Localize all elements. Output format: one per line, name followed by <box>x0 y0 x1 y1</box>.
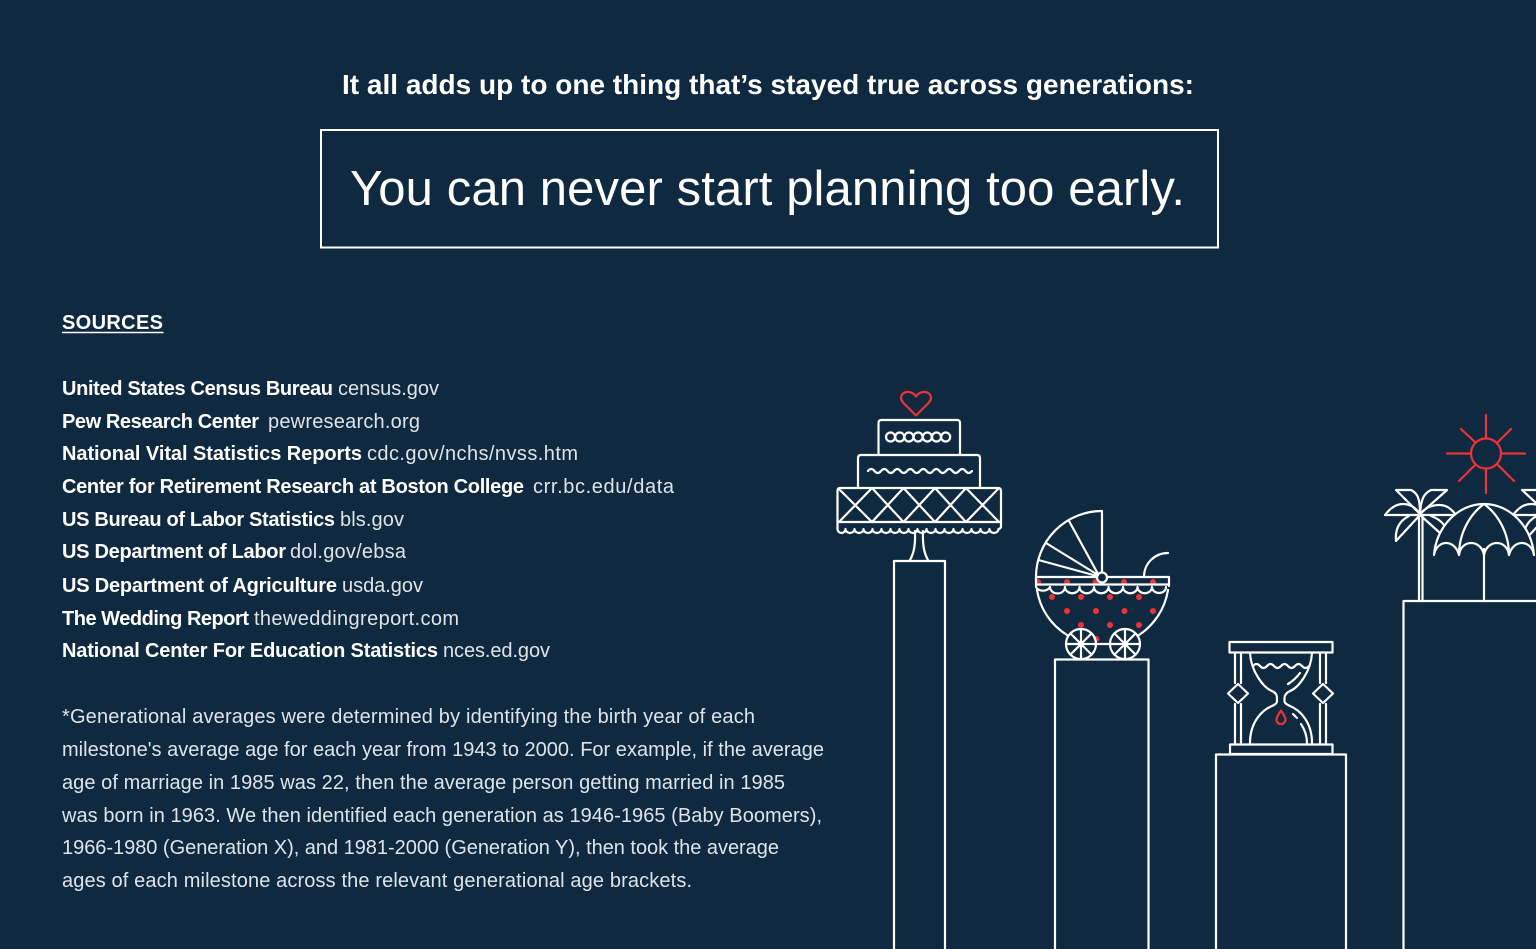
hourglass frame <box>1230 642 1332 754</box>
icon: wedding cake on column <box>838 392 1001 949</box>
sources list: US Department of Agriculture <box>62 575 337 597</box>
footnote text: ages of each milestone across the relevant generational age brackets. <box>62 870 692 892</box>
sources list: crr.bc.edu/data <box>533 476 675 498</box>
column <box>1055 660 1148 949</box>
cake plate scallops <box>838 522 1001 533</box>
stroller wheels <box>1066 629 1140 659</box>
column <box>1404 601 1536 949</box>
cake base lattice <box>838 488 1001 522</box>
column <box>1216 754 1346 949</box>
sources list: US Bureau of Labor Statistics <box>62 509 335 531</box>
cake icing wave <box>868 469 972 473</box>
sources list: US Department of Labor <box>62 541 286 563</box>
sources list: census.gov <box>338 378 439 400</box>
heading: It all adds up to one thing that’s stayed true across generations: <box>342 69 1194 100</box>
callout box: You can never start planning too early. <box>350 162 1185 216</box>
footnote text: was born in 1963. We then identified each generation as 1946-1965 (Baby Boomers), <box>61 805 822 827</box>
footnote text: age of marriage in 1985 was 22, then the average person getting married in 1985 <box>62 772 785 794</box>
icon: hourglass on column <box>1216 642 1346 949</box>
stroller hinge <box>1097 572 1107 582</box>
sources list <box>62 378 675 662</box>
cake tiers <box>858 420 980 488</box>
cake stand stem <box>910 531 928 560</box>
sources list: Pew Research Center <box>62 411 259 433</box>
footnote text: milestone's average age for each year from 1943 to 2000. For example, if the average <box>62 739 824 761</box>
stroller basket <box>1037 590 1168 635</box>
sources list: The Wedding Report <box>62 608 249 630</box>
hourglass glass <box>1250 653 1312 743</box>
sources list: theweddingreport.com <box>254 608 459 630</box>
footnote text <box>61 706 824 892</box>
stroller scallops <box>1036 587 1166 593</box>
sources list: United States Census Bureau <box>62 378 333 400</box>
umbrella <box>1434 504 1534 601</box>
stroller rim <box>1036 577 1169 586</box>
second palm tree <box>1513 490 1536 541</box>
sources list: Center for Retirement Research at Boston College <box>62 476 524 498</box>
hourglass sand wave <box>1253 664 1309 668</box>
footnote text: 1966-1980 (Generation X), and 1981-2000 (Generation Y), then took the average <box>62 837 779 859</box>
hourglass highlights <box>1288 673 1307 743</box>
stroller handle <box>1144 553 1168 577</box>
sources heading: SOURCES <box>62 312 163 334</box>
sources list: National Center For Education Statistics <box>62 640 438 662</box>
stroller hood <box>1036 511 1102 577</box>
column <box>894 561 945 949</box>
stroller axle <box>1096 643 1110 645</box>
sources list: National Vital Statistics Reports <box>62 443 362 465</box>
sources list: nces.ed.gov <box>443 640 550 662</box>
sources list: cdc.gov/nchs/nvss.htm <box>367 443 578 465</box>
hourglass diamonds <box>1228 684 1333 703</box>
cake beads <box>886 432 950 442</box>
icon: heart <box>901 392 931 416</box>
stroller polka dots <box>1035 579 1156 642</box>
icon: beach retirement scene on column <box>1385 415 1536 949</box>
icon: sun <box>1447 415 1525 493</box>
icon: sand drop <box>1276 710 1286 724</box>
footnote text: *Generational averages were determined by identifying the birth year of each <box>62 706 755 728</box>
sources list: usda.gov <box>342 575 423 597</box>
sources list: pewresearch.org <box>268 411 420 433</box>
sources list: dol.gov/ebsa <box>290 541 407 563</box>
sources list: bls.gov <box>340 509 404 531</box>
callout box <box>321 130 1218 248</box>
palm tree <box>1385 490 1456 601</box>
icon: baby stroller on column <box>1035 511 1169 949</box>
